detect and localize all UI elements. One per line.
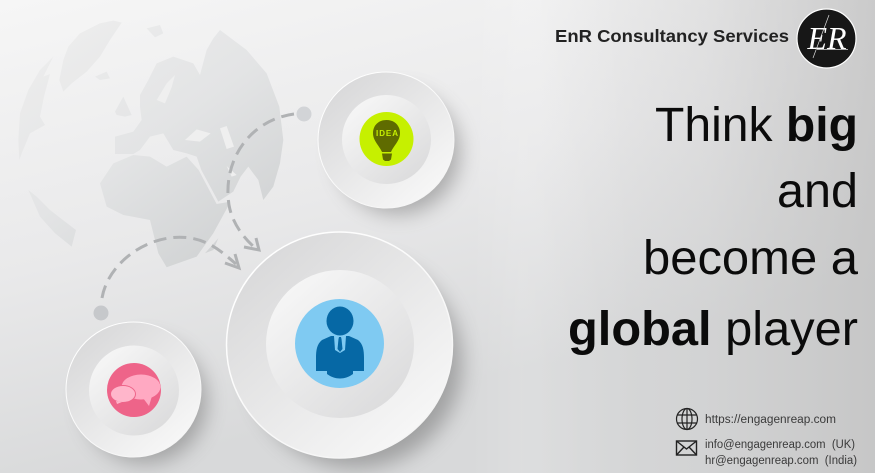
headline <box>568 99 858 356</box>
icon: idea light bulb <box>373 120 400 161</box>
icon: idea light bulb: IDEA <box>376 129 398 138</box>
icon: speech bubbles <box>110 374 160 406</box>
icon: globe <box>676 408 698 430</box>
dashed route from speech circle <box>94 237 239 320</box>
logo: EnR <box>797 9 856 68</box>
website contact <box>676 408 836 430</box>
small circle: speech bubbles <box>66 322 207 463</box>
email contact: hr@engagenreap.com (India) <box>705 455 857 467</box>
headline: Think big <box>655 99 858 152</box>
dashed route from idea circle <box>228 106 312 250</box>
email contact: info@engagenreap.com (UK) <box>705 439 855 451</box>
icon: envelope <box>676 441 696 455</box>
company name: EnR Consultancy Services <box>555 26 789 46</box>
large circle: person <box>226 232 462 468</box>
top circle: idea <box>318 72 460 214</box>
email contact <box>676 439 857 467</box>
logo: EnR: ER <box>806 20 847 56</box>
headline: and <box>777 165 858 218</box>
headline: global player <box>568 303 858 356</box>
website contact: https://engagenreap.com <box>705 414 836 426</box>
world globe map <box>18 21 283 267</box>
headline: become a <box>643 232 858 285</box>
icon: business person <box>316 306 364 378</box>
